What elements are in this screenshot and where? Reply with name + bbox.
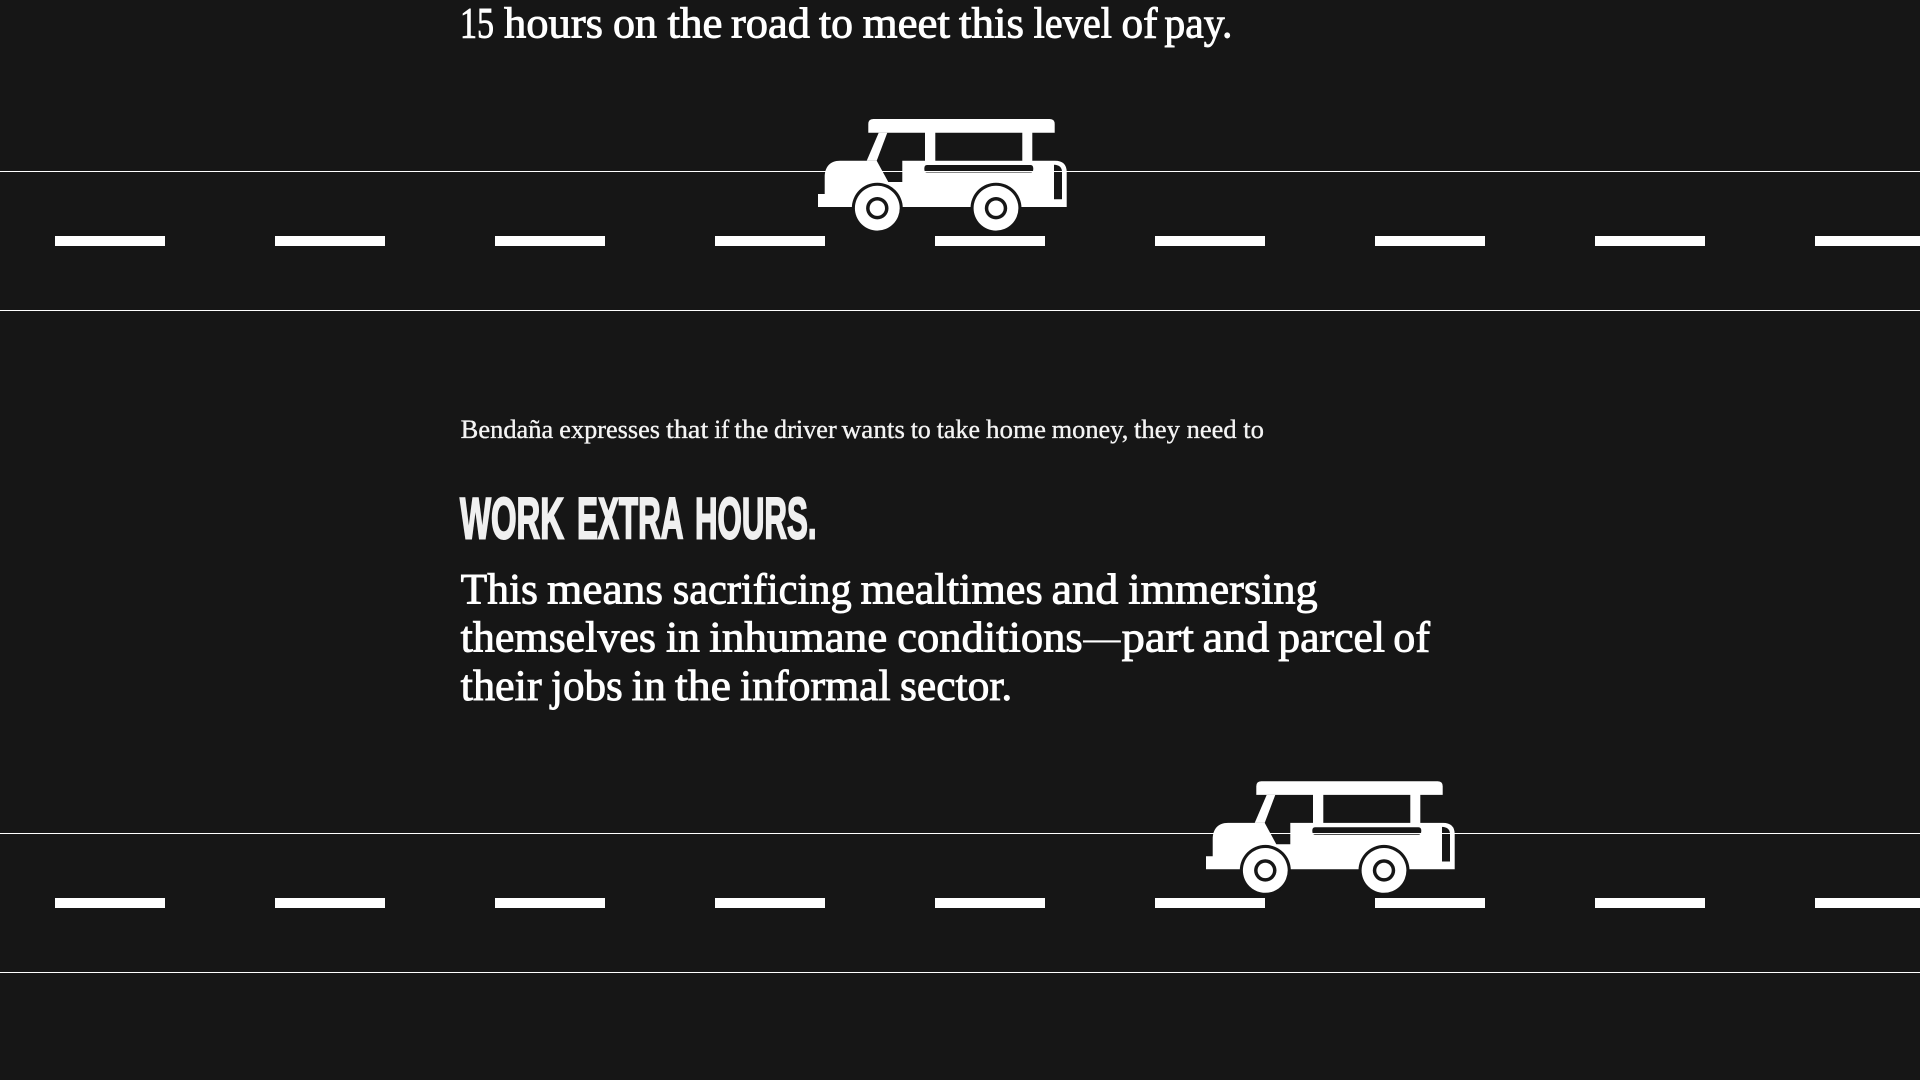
heading: work extra hours: HOURS. (695, 486, 816, 552)
text: closing line of previous paragraph: road (731, 1, 810, 48)
text: lead-in sentence: Bendaña (461, 415, 554, 444)
text: lead-in sentence: wants (842, 415, 905, 444)
text: body paragraph: sacrificing (673, 566, 852, 613)
text: lead-in sentence: the (734, 415, 768, 444)
text: body paragraph: of (1393, 615, 1431, 662)
text: closing line of previous paragraph: hours (504, 1, 603, 48)
text: body paragraph: jobs (549, 663, 623, 710)
text: body paragraph: sector. (900, 663, 1012, 710)
text: closing line of previous paragraph: to (819, 1, 853, 48)
heading: work extra hours: WORK (460, 486, 564, 552)
text: closing line of previous paragraph: on (613, 1, 657, 48)
text: body paragraph: This (461, 566, 538, 613)
heading: work extra hours (460, 486, 816, 552)
text: closing line of previous paragraph: pay. (1164, 1, 1232, 48)
text: lead-in sentence: take (937, 415, 980, 444)
text: closing line of previous paragraph (460, 1, 1232, 48)
text: lead-in sentence: if (714, 415, 730, 444)
text: body paragraph: themselves (461, 615, 656, 662)
text: body paragraph: inhumane (709, 615, 887, 662)
text: lead-in sentence: home (986, 415, 1046, 444)
text: body paragraph: and (1203, 615, 1269, 662)
text: lead-in sentence (461, 415, 1264, 444)
heading: work extra hours: EXTRA (577, 486, 684, 552)
text: body paragraph: in (632, 663, 666, 710)
text: lead-in sentence: driver (774, 415, 837, 444)
text: body paragraph: immersing (1128, 566, 1318, 613)
road: upper with jeepney (0, 119, 1920, 311)
text: body paragraph: and (1052, 566, 1118, 613)
text: lead-in sentence: money, (1052, 415, 1128, 444)
text: closing line of previous paragraph: level (1034, 1, 1112, 48)
text: closing line of previous paragraph: meet (863, 1, 950, 48)
text: lead-in sentence: they (1134, 415, 1180, 444)
text: body paragraph: the (675, 663, 731, 710)
text: lead-in sentence: need (1187, 415, 1237, 444)
text: body paragraph: — (1082, 615, 1122, 662)
text: closing line of previous paragraph: this (959, 1, 1024, 48)
text: lead-in sentence: to (911, 415, 931, 444)
text: closing line of previous paragraph: of (1122, 1, 1158, 48)
text: closing line of previous paragraph: 15 (460, 1, 494, 48)
text: lead-in sentence: that (666, 415, 709, 444)
icon: jeepney upper (818, 119, 1067, 234)
text: body paragraph (461, 566, 1431, 710)
text: lead-in sentence: to (1243, 415, 1264, 444)
text: body paragraph: part (1122, 615, 1194, 662)
icon: jeepney lower (1206, 781, 1455, 896)
text: body paragraph: informal (740, 663, 891, 710)
text: body paragraph: their (461, 663, 542, 710)
text: body paragraph: mealtimes (861, 566, 1043, 613)
text: body paragraph: parcel (1278, 615, 1385, 662)
text: body paragraph: conditions (897, 615, 1083, 662)
text: body paragraph: means (547, 566, 663, 613)
text: body paragraph: in (666, 615, 700, 662)
text: lead-in sentence: expresses (559, 415, 660, 444)
text: closing line of previous paragraph: the (668, 1, 722, 48)
road: lower with jeepney (0, 781, 1920, 973)
